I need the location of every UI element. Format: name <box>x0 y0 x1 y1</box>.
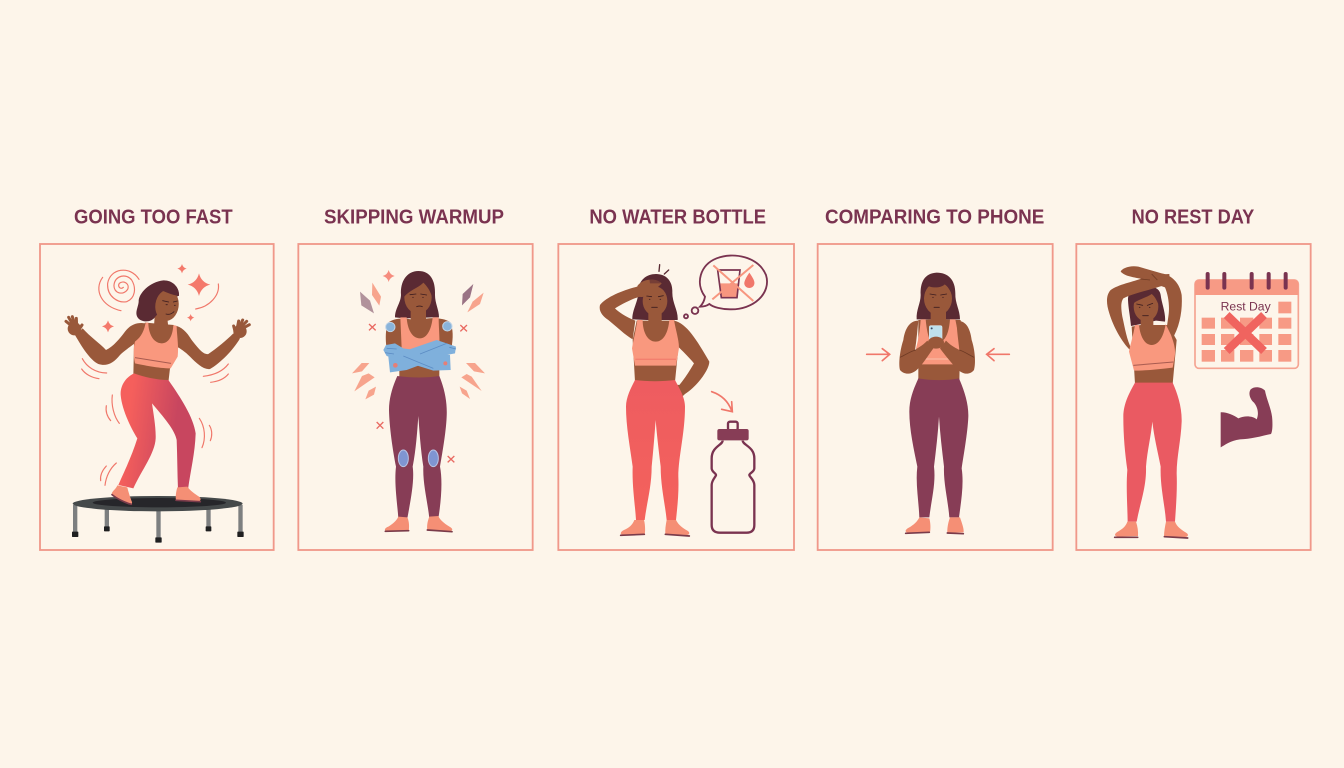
figure: woman with crossed arms <box>383 271 456 532</box>
panel frame <box>818 244 1053 550</box>
figure: woman with hand on forehead <box>600 274 709 536</box>
arrow: pointing to bottle <box>712 392 732 412</box>
heading: comparing to phone: COMPARING TO PHONE <box>825 206 1044 228</box>
icon: motion lines <box>82 359 228 485</box>
panel: no rest day <box>1076 206 1311 550</box>
panel: skipping warmup <box>298 206 533 550</box>
icon: dizzy spiral and sparkles <box>99 264 219 332</box>
icon: trampoline <box>72 496 244 543</box>
icon: flexed bicep <box>1221 387 1272 447</box>
panel: comparing to phone <box>818 206 1053 550</box>
heading: going too fast: GOING TOO FAST <box>74 206 233 228</box>
icon: calendar with crossed-out rest day: Rest Day <box>1221 300 1271 314</box>
figure: woman stretching arms overhead <box>1107 266 1188 538</box>
panel frame <box>558 244 794 550</box>
panel frame <box>40 244 274 550</box>
arrow: right, pointing inward <box>987 349 1009 361</box>
icon: thought bubble with crossed water <box>684 256 767 318</box>
heading: skipping warmup: SKIPPING WARMUP <box>324 206 504 228</box>
icon: empty water bottle <box>712 422 754 533</box>
icon: calendar with crossed-out rest day <box>1195 274 1298 368</box>
icon: stress marks <box>659 265 669 274</box>
panel: going too fast <box>40 206 274 550</box>
panel frame <box>298 244 533 550</box>
icon: tension shards and crosses <box>352 270 485 462</box>
heading: no water bottle: NO WATER BOTTLE <box>589 206 766 228</box>
figure: woman looking at phone <box>899 273 975 534</box>
panel: no water bottle <box>558 206 794 550</box>
arrow: left, pointing inward <box>867 349 890 361</box>
figure: woman bouncing <box>66 280 249 504</box>
panel frame <box>1076 244 1311 550</box>
heading: no rest day: NO REST DAY <box>1132 206 1254 228</box>
